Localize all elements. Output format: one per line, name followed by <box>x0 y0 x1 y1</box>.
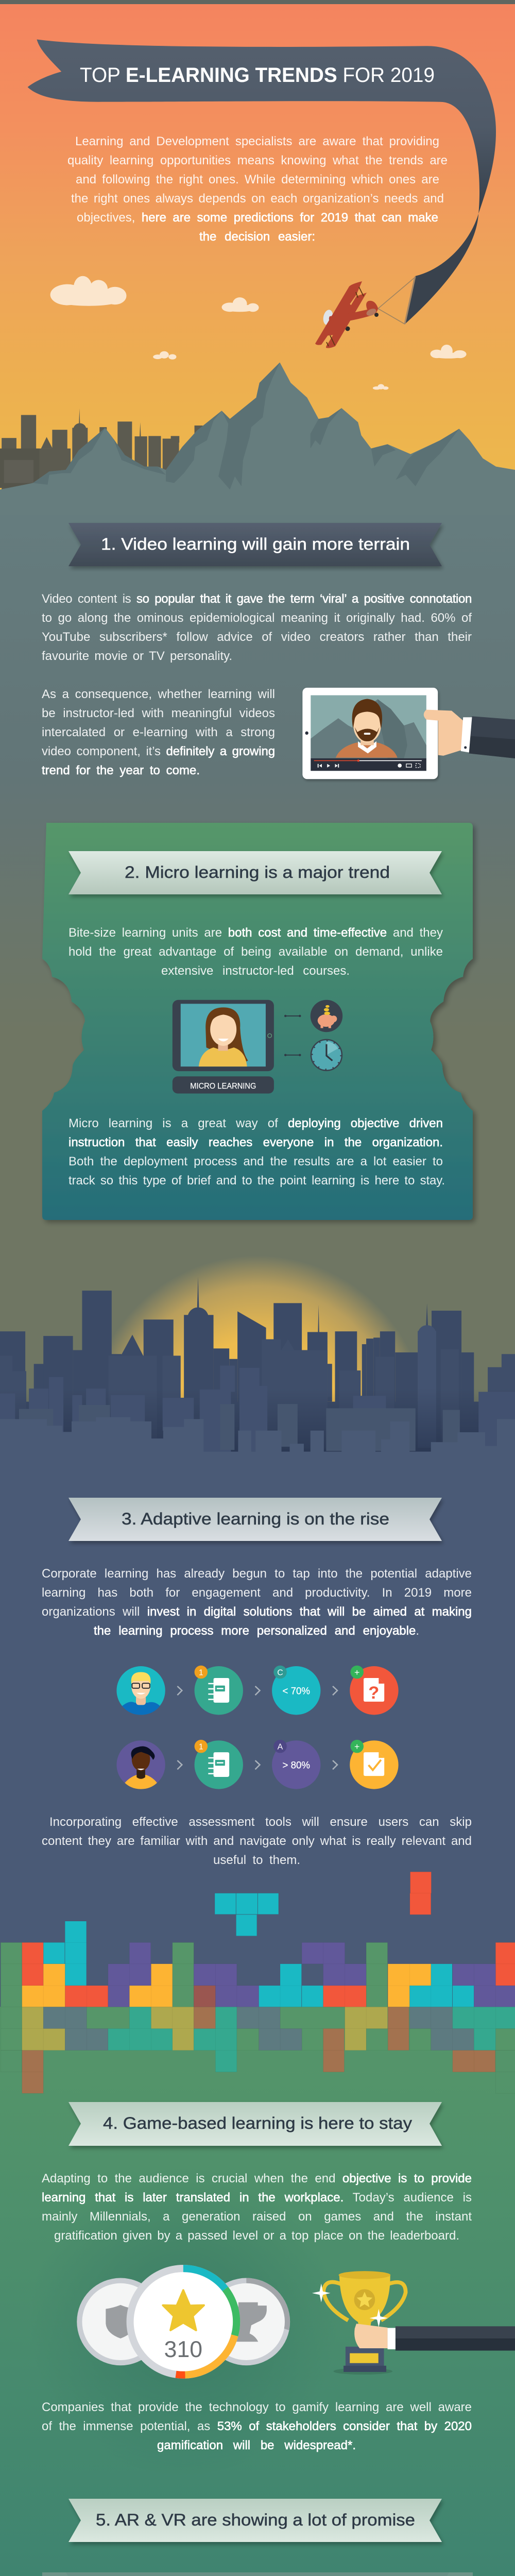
section 1 text: popularity of video: Video content is so popular that it gave the term ‘viral’ a positive connotation <box>42 591 472 606</box>
micro learning benefits: cost and time icons <box>284 1000 342 1071</box>
achievement badges with score <box>29 2167 338 2477</box>
section 4 text: gamification stat: of the immense potential, as 53% of stakeholders consider that by 2020 <box>42 2419 472 2433</box>
section 1 text: popularity of video: to go along the ominous epidemiological meaning it originally had. 60% of <box>42 611 472 624</box>
section 2 text: objective driven instruction: Both the deployment process and the results are a lot easier to <box>68 1154 443 1168</box>
micro learning monitor illustration <box>173 1000 274 1093</box>
section 3 text: adaptive learning: learning has both for engagement and productivity. In 2019 more <box>42 1586 472 1599</box>
section 1 text: popularity of video: favourite movie or TV personality. <box>42 649 232 663</box>
adaptive path row 1: low score learner: C <box>277 1668 283 1677</box>
section 3 text: adaptive learning: organizations will invest in digital solutions that will be aimed at making <box>42 1604 472 1619</box>
trophy held by hand <box>312 2271 515 2375</box>
section 2 text: objective driven instruction: Micro learning is a great way of deploying objective driven <box>68 1116 443 1130</box>
section 2 text: objective driven instruction: track so this type of brief and to the point learning is here to stay. <box>68 1174 445 1187</box>
adaptive path row 1: low score learner: < 70% <box>282 1686 310 1697</box>
sunset glow behind city <box>88 1256 427 1596</box>
panel: AR and VR projection <box>42 2572 473 2576</box>
section 1 text: popularity of video: YouTube subscribers* follow advice of video creators rather than their <box>42 630 472 644</box>
section 4 text: gamification stat: gamification will be widespread*. <box>157 2438 356 2452</box>
heading 1 ribbon <box>68 523 442 566</box>
section 4 text: gamification stat <box>42 2400 472 2452</box>
title banner <box>28 40 496 324</box>
section 1 text: consequence: video component, it’s definitely a growing <box>42 744 275 758</box>
adaptive path row 2: high score learner: > 80% <box>282 1760 310 1771</box>
section 2 text: bite-size learning: hold the great advantage of being available on demand, unlike <box>68 945 443 958</box>
adaptive path row 1: low score learner: ? <box>368 1683 379 1703</box>
section 4 text: adapting to the audience: learning that is later translated in the workplace. Today’s audience is <box>42 2191 472 2204</box>
biplane towing banner <box>315 277 415 348</box>
heading 3 ribbon <box>68 1498 442 1541</box>
adaptive path row 2: high score learner: 1 <box>199 1742 203 1751</box>
heading 5 ribbon: 5. AR & VR are showing a lot of promise <box>96 2511 415 2529</box>
heading 2 ribbon <box>68 851 442 894</box>
adaptive path row 2: high score learner: A <box>278 1742 283 1751</box>
adaptive path row 1: low score learner: + <box>354 1667 359 1677</box>
section 4 text: adapting to the audience: mainly Millennials, a generation raised on games and the instant <box>42 2209 472 2224</box>
intro paragraph: and following the right ones. While determining which ones are <box>76 172 439 187</box>
section 3 text: assessment tools: content they are familiar with and navigate only what is really relevant and <box>42 1834 472 1848</box>
section 2 text: bite-size learning: extensive instructor-led courses. <box>161 963 350 978</box>
intro paragraph: the decision easier: <box>199 230 315 243</box>
section 1 text: consequence: trend for the year to come. <box>42 764 200 777</box>
heading 4 ribbon: 4. Game-based learning is here to stay <box>103 2114 412 2132</box>
intro paragraph <box>67 134 448 243</box>
section 3 text: assessment tools: Incorporating effective assessment tools will ensure users can skip <box>49 1815 472 1829</box>
section 4 text: adapting to the audience: Adapting to the audience is crucial when the end objective is to provide <box>42 2171 472 2185</box>
clouds <box>50 276 467 389</box>
title banner: TOP E-LEARNING TRENDS FOR 2019 <box>80 64 435 87</box>
section 1 text: consequence: intercalated or e-learning with a strong <box>42 725 275 739</box>
section 2 text: bite-size learning <box>68 925 443 978</box>
section 1 text: consequence: be instructor-led with meaningful videos <box>42 706 275 720</box>
section 2 text: bite-size learning: Bite-size learning units are both cost and time-effective and they <box>68 925 443 940</box>
adaptive path row 1: low score learner: 1 <box>199 1668 203 1677</box>
panel: micro learning <box>42 823 473 1220</box>
achievement badges with score: 310 <box>164 2337 202 2362</box>
heading 5 ribbon <box>68 2499 442 2542</box>
section 3 text: adaptive learning <box>42 1566 472 1637</box>
heading 1 ribbon: 1. Video learning will gain more terrain <box>101 535 410 553</box>
intro paragraph: objectives, here are some predictions for 2019 that can make <box>77 210 438 225</box>
heading 3 ribbon: 3. Adaptive learning is on the rise <box>122 1510 389 1528</box>
section 3 text: adaptive learning: Corporate learning has already begun to tap into the potential adaptive <box>42 1566 472 1581</box>
section 4 text: adapting to the audience <box>42 2171 472 2242</box>
section 3 text: assessment tools <box>42 1815 472 1867</box>
intro paragraph: the right ones always depends on each organization’s needs and <box>71 192 444 205</box>
intro paragraph: Learning and Development specialists are aware that providing <box>75 134 439 148</box>
mountains <box>0 362 515 515</box>
adaptive path row 2: high score learner: + <box>354 1741 359 1752</box>
city skyline silhouette <box>0 1277 515 1622</box>
section 2 text: objective driven instruction <box>68 1116 445 1187</box>
section 3 text: assessment tools: useful to them. <box>213 1853 300 1867</box>
section 4 text: gamification stat: Companies that provide the technology to gamify learning are well aware <box>42 2400 472 2414</box>
adaptive path row 1: low score learner <box>116 1666 399 1715</box>
section 1 text: consequence: As a consequence, whether learning will <box>42 687 275 701</box>
tablet with video lesson and hand <box>302 688 515 779</box>
distant city skyline <box>0 409 202 495</box>
section 4 text: adapting to the audience: gratification given by a passed level or a top place on the leaderboard. <box>54 2229 459 2242</box>
micro learning monitor illustration: MICRO LEARNING <box>190 1082 256 1091</box>
section 2 text: objective driven instruction: instruction that easily reaches everyone in the organization. <box>68 1136 443 1149</box>
heading 2 ribbon: 2. Micro learning is a major trend <box>125 863 390 882</box>
adaptive path row 2: high score learner <box>116 1740 399 1789</box>
tetris blocks <box>1 1872 515 2093</box>
section 1 text: consequence <box>42 687 275 777</box>
section 1 text: popularity of video <box>42 591 472 663</box>
heading 4 ribbon <box>68 2102 442 2146</box>
intro paragraph: quality learning opportunities means knowing what the trends are <box>67 154 448 167</box>
section 3 text: adaptive learning: the learning process more personalized and enjoyable. <box>94 1624 419 1637</box>
